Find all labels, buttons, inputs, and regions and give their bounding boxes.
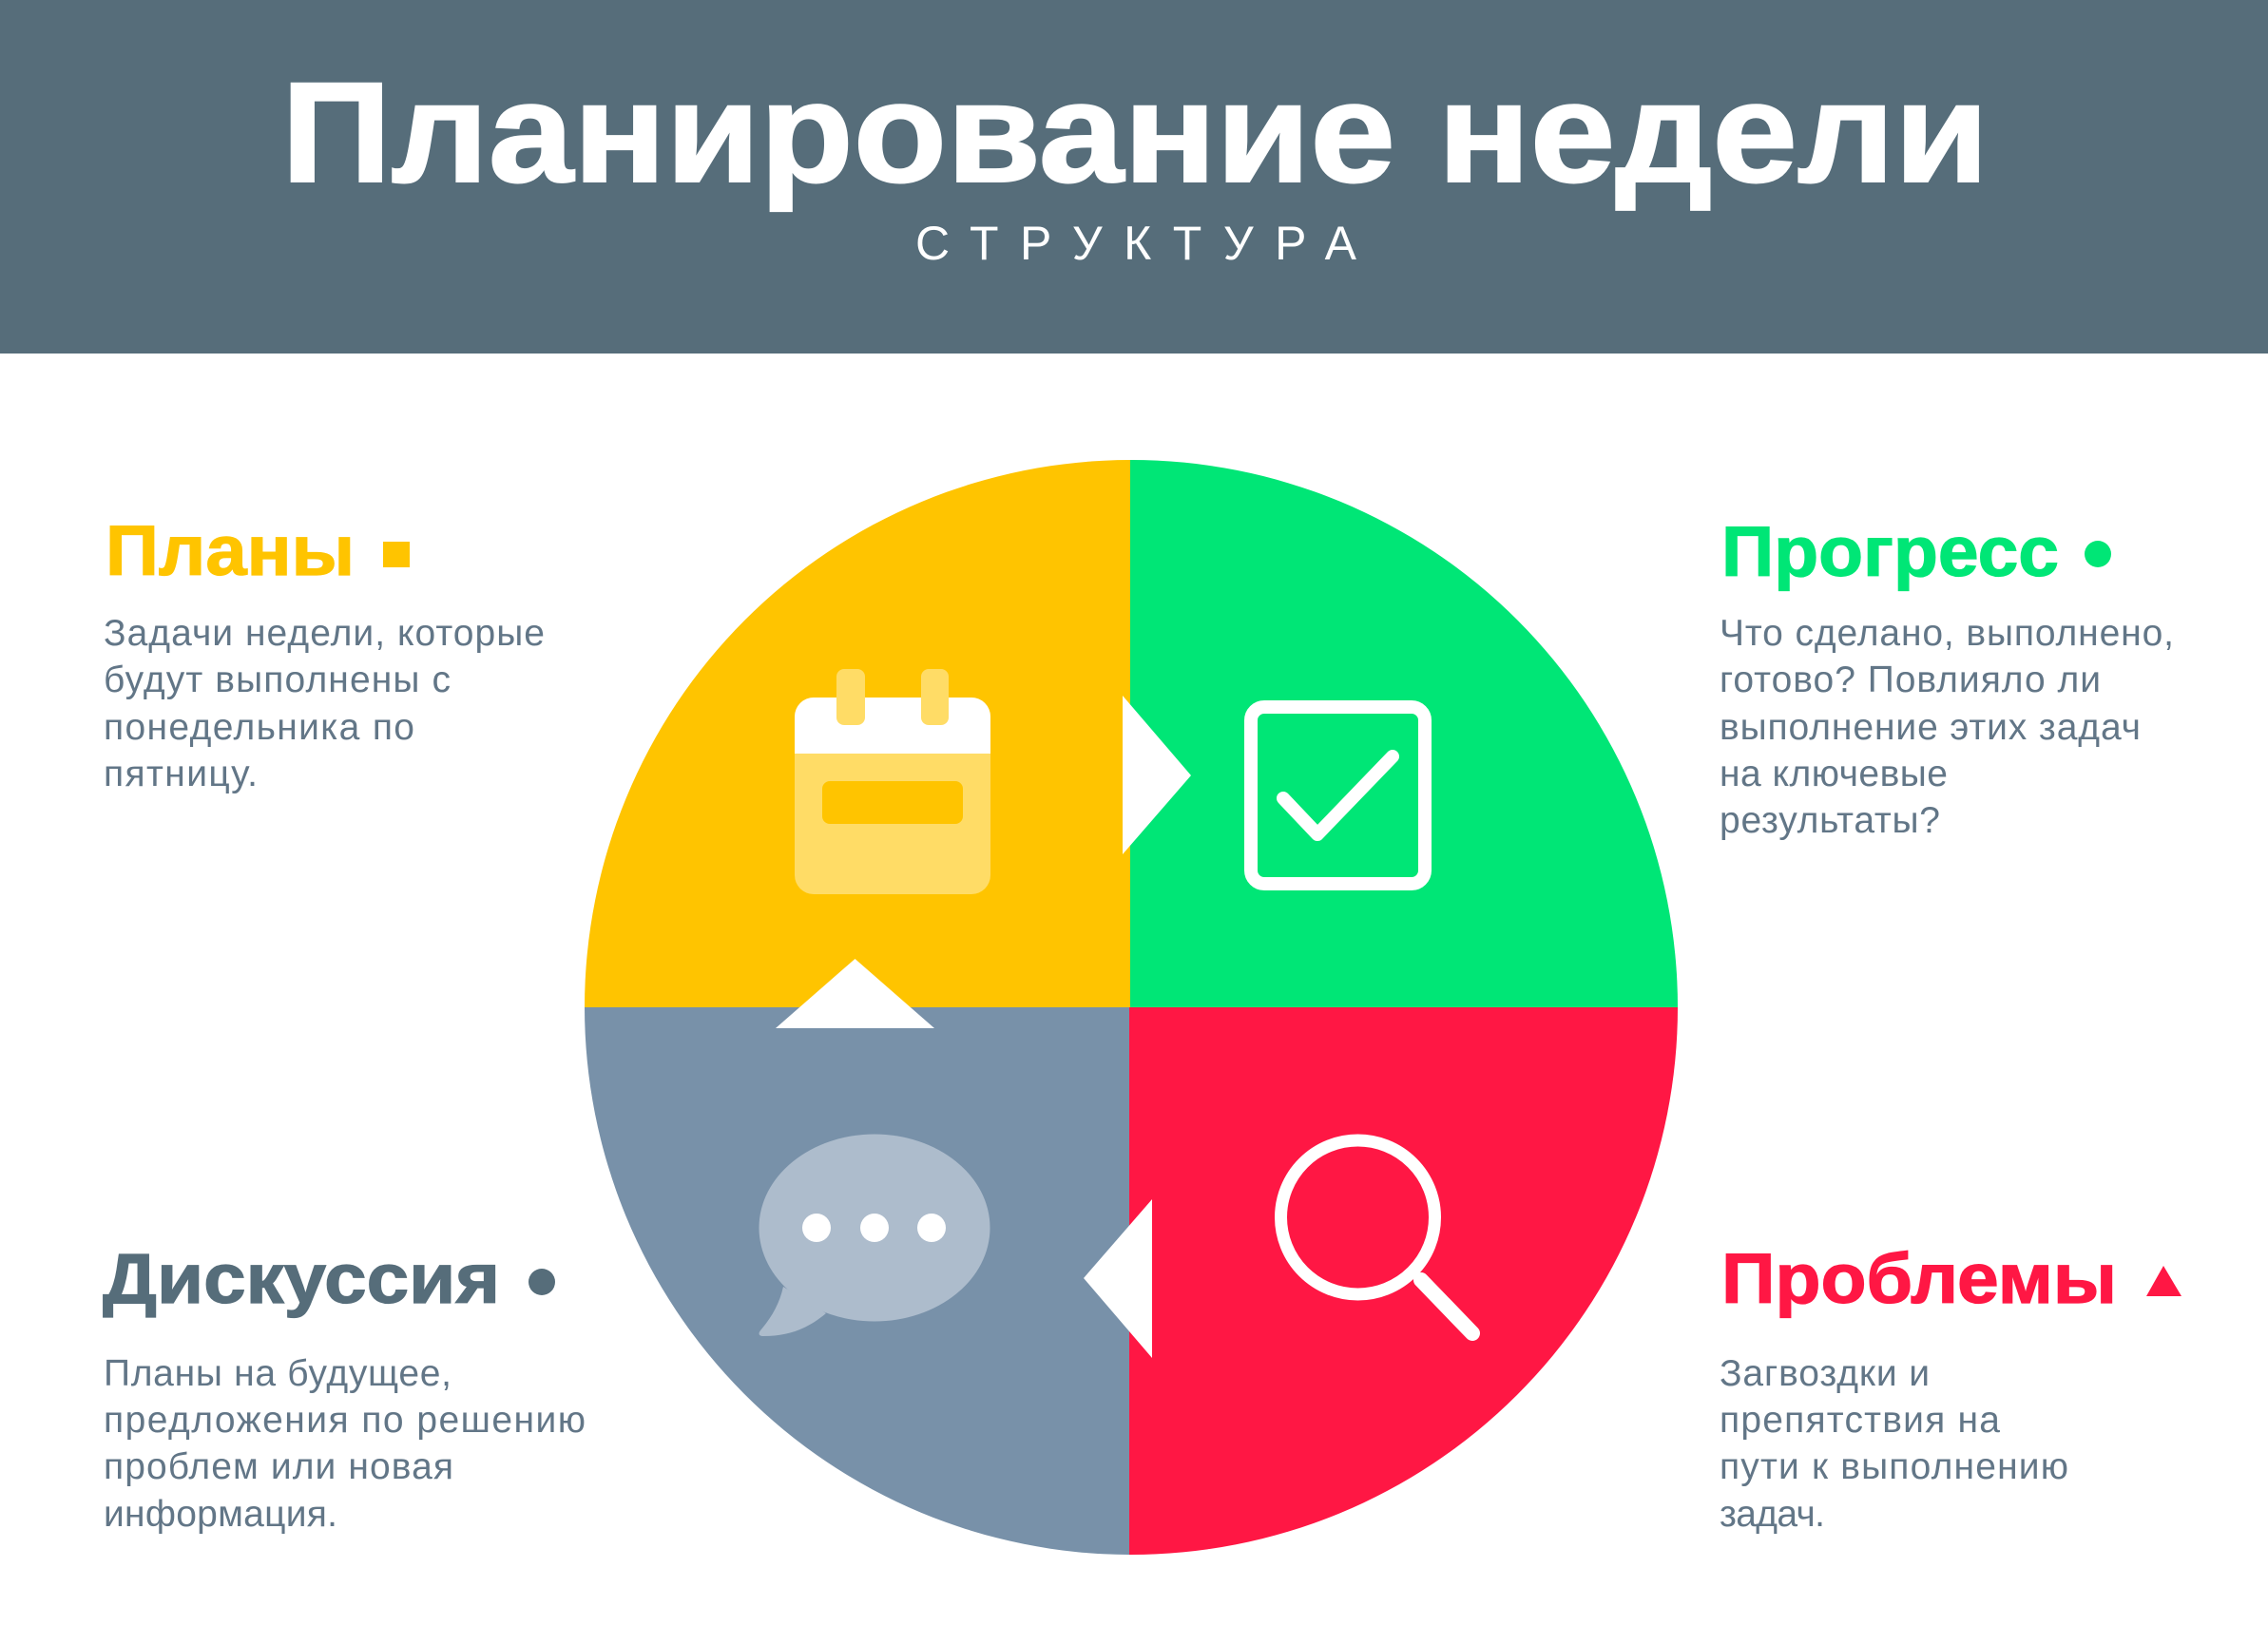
body text: discussion: Планы на будущее, — [104, 1353, 452, 1394]
body text: problems: Загвоздки и — [1720, 1353, 1930, 1394]
title: Планирование недели — [281, 52, 1989, 212]
body text: progress: результаты? — [1720, 800, 1940, 841]
heading: problems: Проблемы — [1721, 1239, 2117, 1318]
header band — [0, 0, 2268, 354]
marker: circle — [529, 1269, 555, 1295]
body text: problems: пути к выполнению — [1720, 1446, 2068, 1487]
body text: discussion — [104, 1353, 586, 1535]
marker: square — [383, 542, 410, 567]
body text: progress: Что сделано, выполнено, — [1720, 613, 2174, 654]
panel: discussion — [103, 1239, 586, 1535]
heading: progress: Прогресс — [1721, 512, 2059, 591]
body text: plans: Задачи недели, которые — [104, 613, 545, 654]
pie: four quadrant cycle — [585, 460, 1678, 1555]
quadrant: plans — [585, 460, 1131, 1007]
body text: progress — [1720, 613, 2174, 841]
body text: plans: будут выполнены с — [104, 660, 451, 700]
heading: discussion: Дискуссия — [103, 1239, 500, 1318]
body text: discussion: информация. — [104, 1494, 337, 1535]
marker: circle — [2085, 541, 2111, 567]
subtitle: СТРУКТУРА — [915, 217, 1357, 270]
body text: discussion: предложения по решению — [104, 1400, 586, 1441]
body text: plans: понедельника по — [104, 707, 414, 748]
body text: problems — [1720, 1353, 2068, 1535]
arrow: problems to discussion — [1084, 1199, 1152, 1358]
body text: problems: препятствия на — [1720, 1400, 2000, 1441]
arrow: discussion to plans — [776, 959, 934, 1028]
icon: magnifier — [1281, 1140, 1472, 1333]
icon: checkbox — [1251, 707, 1425, 884]
body text: plans — [104, 613, 545, 794]
arrow: plans to progress — [1123, 696, 1191, 854]
body text: progress: готово? Повлияло ли — [1720, 660, 2101, 700]
quadrant: discussion — [585, 1007, 1129, 1555]
body text: problems: задач. — [1720, 1494, 1825, 1535]
body text: progress: на ключевые — [1720, 754, 1948, 794]
marker: triangle — [2146, 1266, 2182, 1296]
body text: progress: выполнение этих задач — [1720, 707, 2141, 748]
panel: plans — [104, 511, 545, 794]
body text: discussion: проблем или новая — [104, 1446, 453, 1487]
quadrant: problems — [1129, 1007, 1678, 1555]
icon: calendar — [795, 669, 990, 894]
body text: plans: пятницу. — [104, 754, 258, 794]
panel: progress — [1720, 512, 2174, 841]
quadrant: progress — [1130, 460, 1678, 1007]
panel: problems — [1720, 1239, 2182, 1535]
icon: speech bubble — [759, 1135, 990, 1336]
heading: plans: Планы — [106, 511, 355, 590]
